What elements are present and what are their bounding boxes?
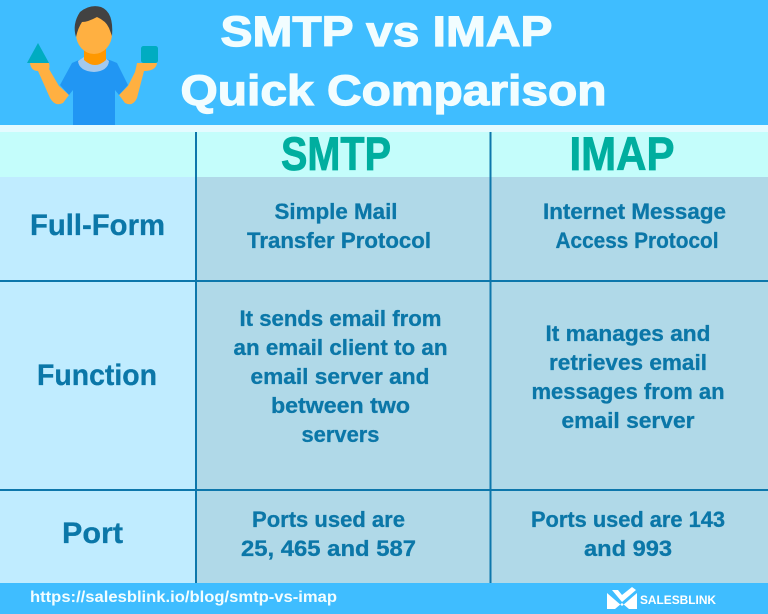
row label: Port: Port [62,517,123,550]
SMTP function [234,306,448,447]
icon: logo mark [607,593,637,609]
left arm [30,63,69,104]
IMAP function: messages from an [532,379,724,404]
SMTP full form: Simple Mail [274,199,398,224]
IMAP function [532,321,724,433]
SMTP port [241,507,416,561]
title [180,8,606,115]
title: SMTP vs IMAP [220,8,552,56]
footer url: https://salesblink.io/blog/smtp-vs-imap [30,589,337,606]
SMTP function: It sends email from [240,306,442,331]
right arm [119,63,157,104]
IMAP port: and 993 [584,536,672,561]
column heading: IMAP: IMAP [570,127,674,180]
row label: Function: Function [37,359,157,392]
IMAP port: Ports used are 143 [531,507,725,532]
IMAP function: retrieves email [549,350,707,375]
SMTP port: 25, 465 and 587 [241,536,416,561]
collar [78,57,109,72]
header band [0,0,768,126]
icon: square [141,46,158,63]
logo: SalesBlink [607,587,716,609]
IMAP function: email server [562,408,695,433]
IMAP function: It manages and [546,321,710,346]
hair [75,6,112,37]
left label column [0,177,196,583]
SMTP port: Ports used are [252,507,405,532]
icon: triangle [27,43,49,63]
header highlight strip [0,125,768,132]
table header row [0,132,768,177]
SMTP function: between two [271,393,410,418]
SMTP function: an email client to an [234,335,448,360]
illustration: person balancing shapes [27,6,158,125]
IMAP full form [543,199,726,253]
title: Quick Comparison [180,67,606,115]
SMTP full form: Transfer Protocol [247,228,431,253]
SMTP function: email server and [250,364,430,389]
data cells background [196,177,768,583]
footer band [0,583,768,614]
column heading: SMTP: SMTP [281,127,391,180]
row label: Full-Form: Full-Form [30,209,165,242]
SMTP function: servers [302,422,380,447]
shirt [60,58,128,125]
face [76,14,112,54]
table grid lines [0,132,768,583]
IMAP full form: Access Protocol [556,228,718,253]
logo wordmark: SALESBLINK [640,593,716,607]
IMAP full form: Internet Message [543,199,726,224]
neck [84,48,106,65]
IMAP port [531,507,725,561]
SMTP full form [247,199,431,253]
